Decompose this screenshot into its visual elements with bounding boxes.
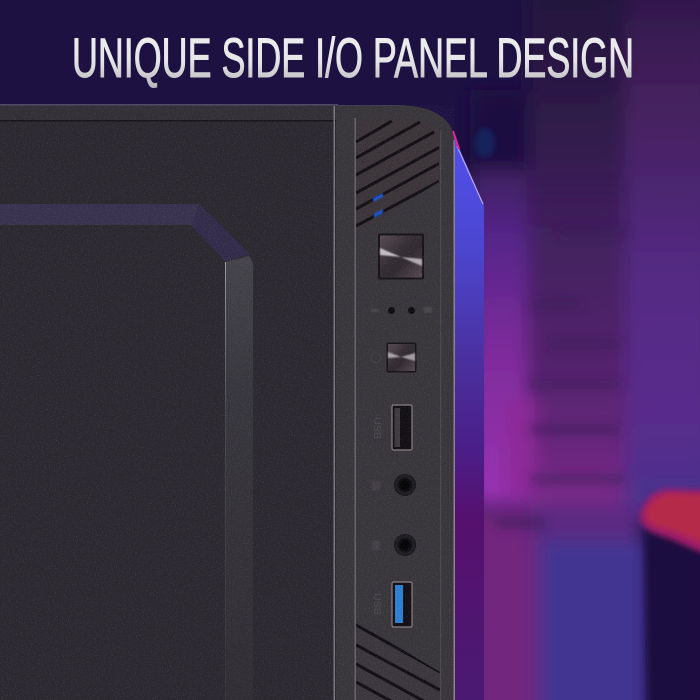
status LEDs (371, 307, 432, 314)
USB 2.0 port: USB (371, 417, 382, 439)
blue light through vents (373, 193, 383, 202)
USB 3.0 port (371, 582, 412, 627)
blurred background: room with purple bricks (468, 0, 700, 700)
red glowing blob (640, 489, 700, 556)
panel right highlight (334, 106, 335, 700)
top ventilation slats (356, 118, 440, 234)
pc case: I/O side panel frame (336, 104, 456, 700)
bevel diagonal face (191, 205, 250, 262)
bottom ventilation slats (356, 620, 440, 700)
side highlight edge (457, 146, 483, 204)
reset button (371, 342, 416, 372)
audio jack: headphone (372, 474, 416, 496)
case texture (0, 105, 455, 700)
audio jack: microphone (372, 534, 416, 556)
bevel horizontal face (0, 204, 200, 225)
blurred brick courses (493, 344, 626, 532)
dark object below red blob (645, 530, 700, 700)
pc case: side face (452, 131, 484, 700)
pc case: front main panel (0, 104, 338, 700)
bevel vertical strip (225, 256, 253, 700)
USB 2.0 port (371, 405, 412, 450)
USB 3.0 port: USB (371, 593, 382, 615)
top strip (0, 104, 338, 121)
power button (378, 234, 424, 280)
